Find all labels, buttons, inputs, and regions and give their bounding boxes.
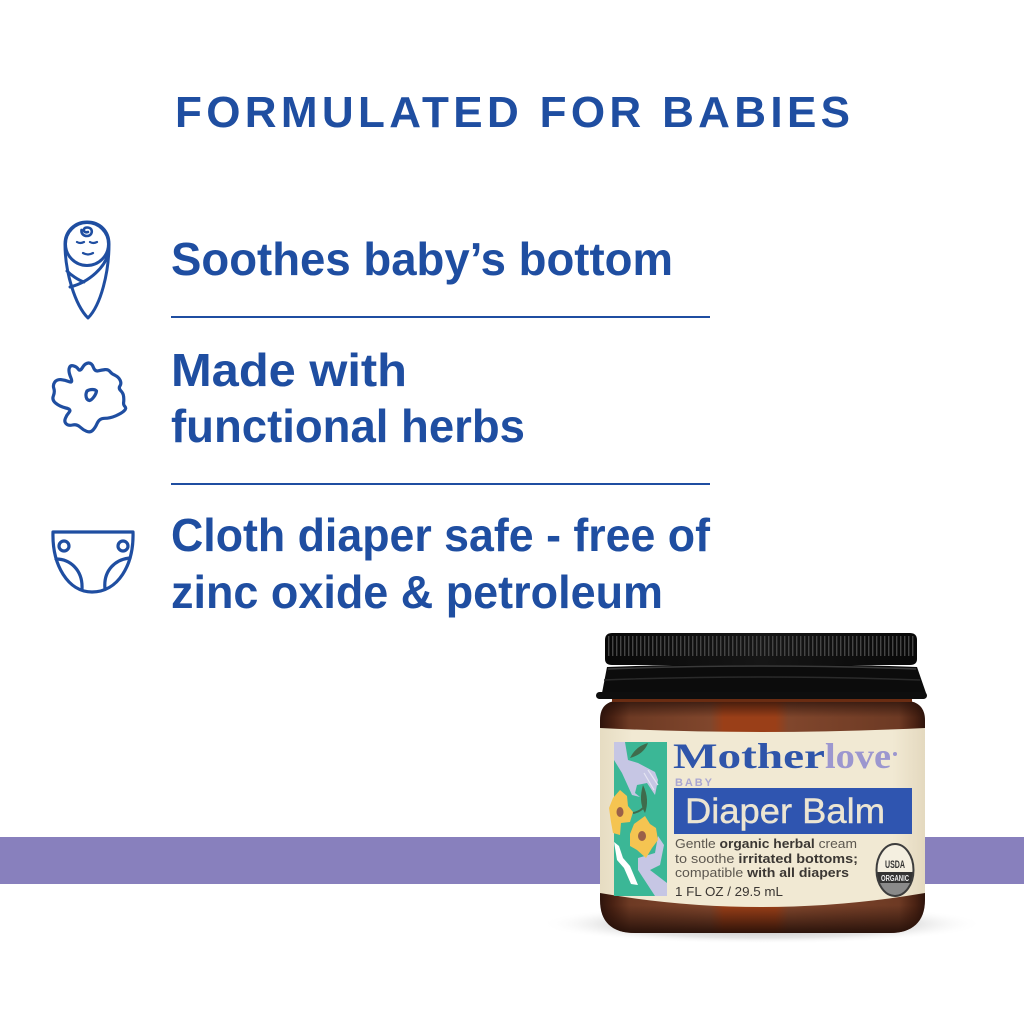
jar shadow — [540, 904, 984, 944]
label description — [675, 836, 858, 899]
product jar — [578, 633, 946, 940]
jar glass — [600, 701, 925, 933]
purple band — [0, 837, 1024, 884]
jar label — [600, 728, 925, 907]
usda organic seal: ORGANIC — [881, 874, 909, 883]
feature text: herbs — [171, 344, 525, 452]
baby label: BABY — [675, 777, 713, 789]
usda organic seal — [875, 844, 915, 897]
jar cap — [596, 633, 927, 702]
divider 2 — [171, 483, 710, 485]
product name bar: Diaper Balm — [685, 792, 885, 831]
flower one — [609, 790, 633, 835]
feature text: cloth diaper — [171, 509, 711, 618]
label description: to soothe irritated bottoms; — [675, 851, 858, 866]
divider 1 — [171, 316, 710, 318]
label description: compatible with all diapers — [675, 865, 849, 880]
usda organic seal: USDA — [885, 859, 905, 871]
title: FORMULATED FOR BABIES — [175, 88, 850, 137]
registered mark — [893, 752, 897, 756]
label art — [609, 742, 667, 896]
label description: Gentle organic herbal cream — [675, 836, 857, 851]
feature text: soothes: Soothes baby’s bottom — [171, 233, 673, 285]
feature text: cloth diaper: Cloth diaper safe - free of — [171, 509, 711, 561]
icon: flower — [53, 363, 126, 432]
icon: swaddled baby — [65, 222, 109, 318]
brand wordmark: Mother — [673, 736, 825, 776]
feature text: herbs: functional herbs — [171, 400, 525, 452]
feature text: cloth diaper: zinc oxide & petroleum — [171, 566, 663, 618]
brand wordmark: love — [825, 736, 891, 776]
label description: 1 FL OZ / 29.5 mL — [675, 884, 783, 899]
flower two — [630, 816, 658, 858]
product name bar — [674, 788, 912, 834]
icon: diaper — [53, 532, 133, 592]
feature text: herbs: Made with — [171, 344, 407, 396]
brand wordmark — [673, 736, 891, 776]
